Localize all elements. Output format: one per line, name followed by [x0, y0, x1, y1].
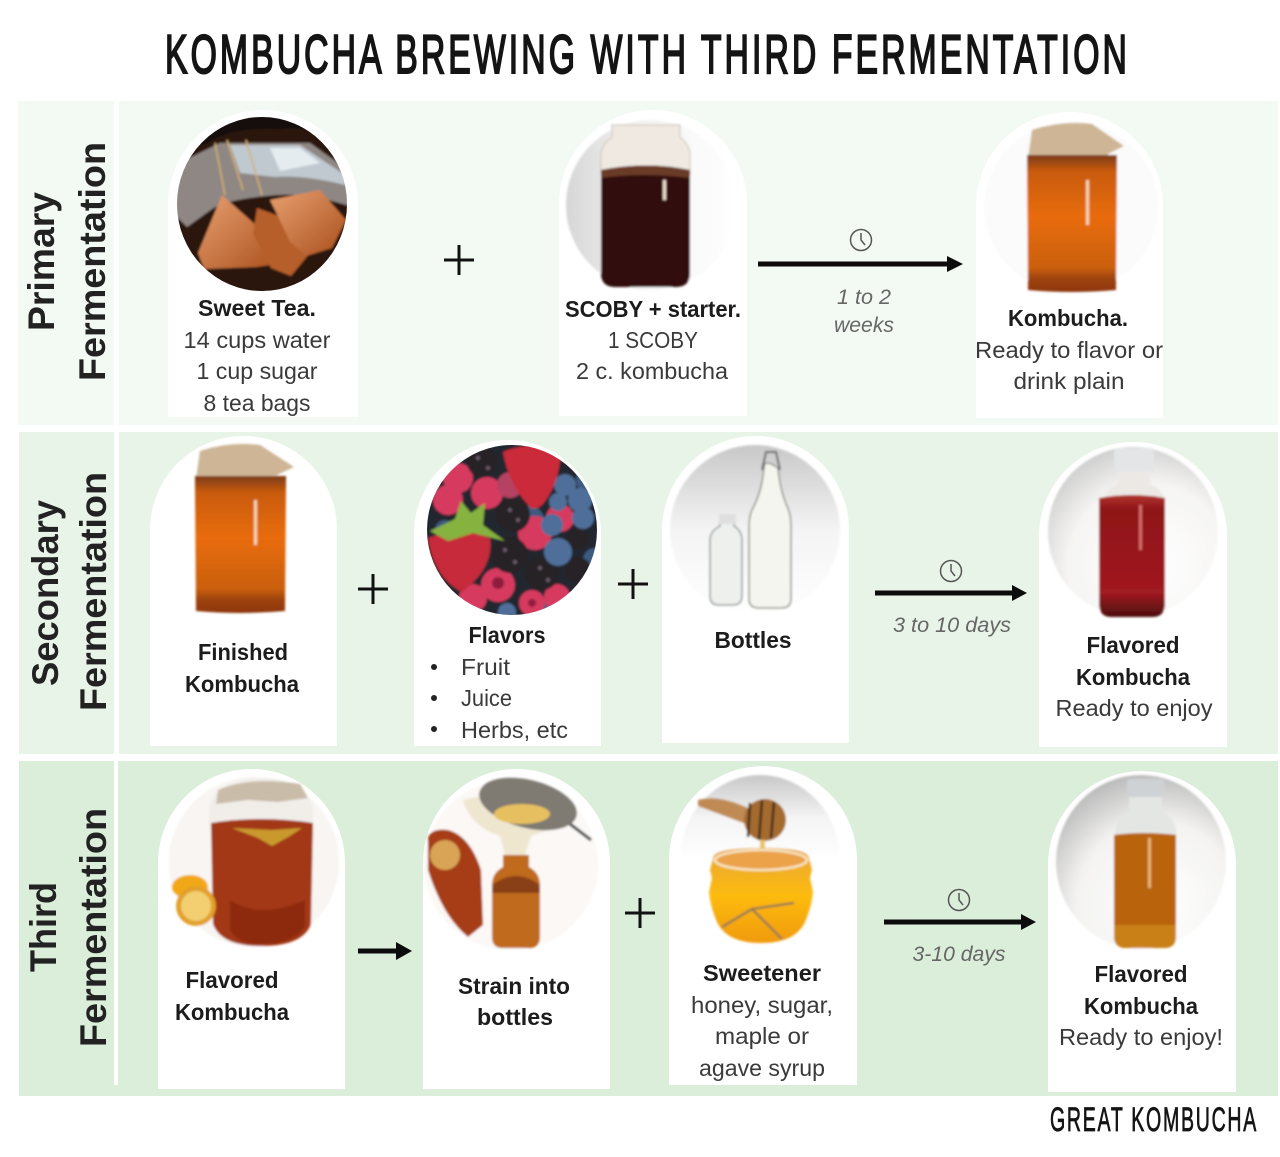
text: sweetener — [691, 960, 833, 1081]
icon: red kombucha bottle photo — [1048, 447, 1218, 617]
text: scoby and starter: 2 c. kombucha — [576, 358, 728, 384]
text: strain into bottles: Strain into — [458, 973, 570, 999]
text: flavored kombucha — [1056, 632, 1213, 721]
text: flavors: Herbs, etc — [461, 717, 568, 743]
text: finished kombucha: Finished — [198, 639, 288, 665]
text: final flavored kombucha: Flavored — [1094, 961, 1188, 987]
text: final flavored kombucha — [1059, 961, 1223, 1050]
icon: jar of kombucha photo — [195, 444, 294, 613]
text: duration: 1 to 2 — [837, 286, 891, 309]
text: sweet tea: 14 cups water — [184, 327, 331, 353]
arrow: 1 to 2 weeks — [758, 230, 963, 337]
icon: clock — [948, 890, 970, 910]
plus sign — [618, 569, 648, 599]
icon: honey jar photo — [680, 775, 840, 943]
panel: secondary fermentation — [19, 432, 1278, 754]
icon: strainer and bottle photo — [424, 769, 598, 950]
text: sweetener: maple or — [715, 1023, 809, 1049]
plus sign — [358, 574, 388, 604]
text: final flavored kombucha: Kombucha — [1084, 993, 1198, 1019]
text: flavored kombucha: Kombucha — [175, 999, 289, 1025]
icon: clock — [850, 230, 872, 250]
arrow: 3 to 10 days — [875, 560, 1027, 637]
text: final flavored kombucha: Ready to enjoy! — [1059, 1024, 1223, 1050]
text: kombucha: Kombucha. — [1008, 305, 1128, 331]
icon: jar of dark tea photo — [566, 120, 736, 290]
text: finished kombucha: Kombucha — [185, 671, 299, 697]
heading: third fermentation: Fermentation — [73, 808, 114, 1047]
card: scoby and starter — [559, 110, 747, 416]
text: flavors: Flavors — [468, 622, 546, 648]
heading: primary fermentation — [21, 142, 113, 381]
card: flavored kombucha with citrus — [158, 769, 345, 1089]
text: scoby and starter — [565, 296, 741, 384]
text: sweet tea: 8 tea bags — [204, 390, 310, 416]
heading: secondary fermentation: Fermentation — [73, 472, 114, 711]
heading: primary fermentation: Fermentation — [72, 142, 113, 381]
panel: third fermentation — [19, 761, 1278, 1096]
text: duration: weeks — [834, 314, 894, 337]
heading: primary fermentation: Primary — [21, 192, 62, 331]
text: sweet tea: Sweet Tea. — [198, 295, 316, 321]
icon: tea bags photo — [177, 117, 347, 291]
heading: secondary fermentation: Secondary — [25, 500, 66, 686]
text: duration — [834, 286, 894, 337]
text: flavored kombucha: Ready to enjoy — [1056, 695, 1213, 721]
icon: glass bottles photo — [670, 445, 840, 615]
text: scoby and starter: 1 SCOBY — [608, 327, 698, 353]
text: kombucha — [975, 305, 1163, 394]
text: flavored kombucha: Flavored — [186, 967, 278, 993]
text: flavors — [431, 622, 568, 743]
text: flavors: Fruit — [461, 654, 511, 680]
icon: berries photo — [427, 445, 597, 615]
card: final flavored kombucha — [1048, 771, 1236, 1092]
text: strain into bottles: bottles — [477, 1004, 553, 1030]
text: sweetener: honey, sugar, — [691, 992, 833, 1018]
icon: jar with lemon photo — [169, 777, 339, 947]
text: flavored kombucha — [175, 967, 289, 1025]
card: flavors — [414, 440, 607, 746]
card: finished kombucha — [150, 436, 337, 746]
card: sweet tea — [168, 110, 358, 417]
icon: clock — [940, 560, 962, 582]
text: flavors: Juice — [461, 685, 512, 711]
heading: secondary fermentation — [25, 472, 114, 711]
card: flavored kombucha — [1039, 442, 1227, 747]
heading: third fermentation — [23, 808, 114, 1047]
text: sweet tea: 1 cup sugar — [196, 358, 318, 384]
card: strain into bottles — [423, 769, 610, 1089]
card: kombucha — [975, 112, 1163, 418]
text: flavored kombucha: Flavored — [1086, 632, 1180, 658]
icon: jar of kombucha photo — [984, 122, 1158, 292]
arrow: 3-10 days — [884, 890, 1036, 966]
text: strain into bottles — [458, 973, 570, 1030]
heading: third fermentation: Third — [23, 882, 64, 972]
text: kombucha: Ready to flavor or — [975, 337, 1163, 363]
arrow: strain — [358, 942, 412, 960]
panel: primary fermentation — [18, 101, 1278, 425]
text: sweet tea — [184, 295, 331, 416]
text: duration: 3 to 10 days — [893, 614, 1012, 637]
text: kombucha: drink plain — [1014, 368, 1124, 394]
plus sign — [444, 245, 474, 275]
text: finished kombucha — [185, 639, 299, 697]
icon: amber kombucha bottle photo — [1056, 775, 1226, 949]
plus sign — [625, 898, 655, 928]
card: bottles — [662, 436, 849, 743]
text: scoby and starter: SCOBY + starter. — [565, 296, 741, 322]
text: sweetener: Sweetener — [703, 960, 821, 986]
text: duration: 3-10 days — [912, 943, 1006, 966]
text: sweetener: agave syrup — [699, 1055, 825, 1081]
text: bottles: Bottles — [714, 627, 792, 653]
card: sweetener — [669, 766, 857, 1085]
text: flavored kombucha: Kombucha — [1076, 664, 1190, 690]
